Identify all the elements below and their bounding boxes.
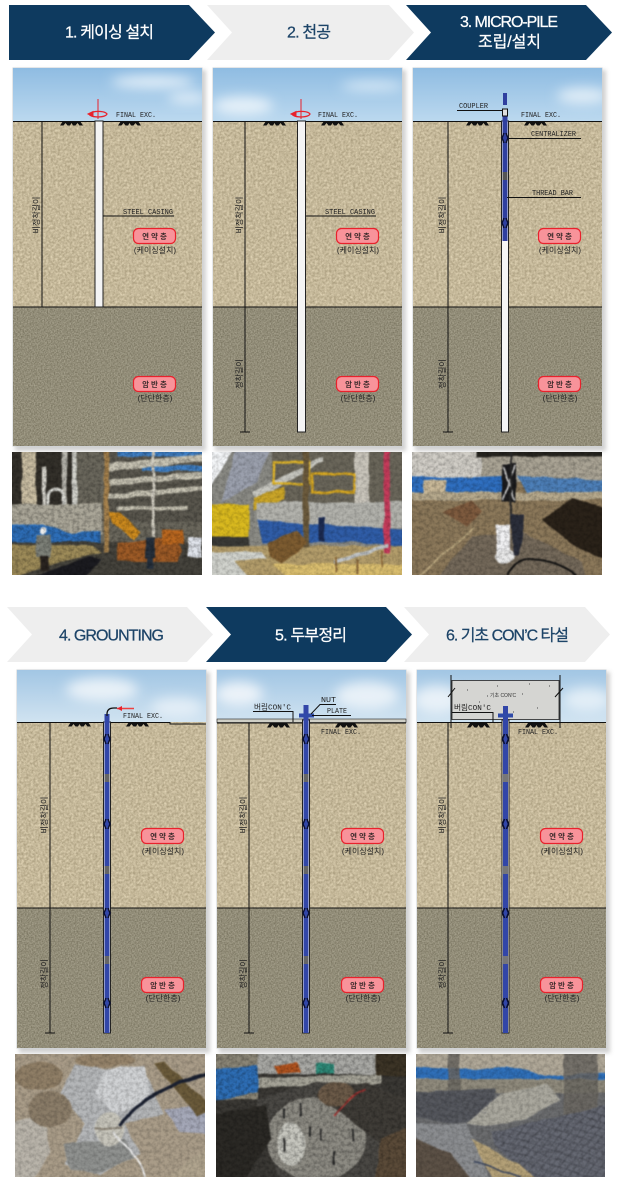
label: soft layer: 연 약 층 bbox=[345, 231, 370, 241]
label: rock layer bbox=[142, 978, 184, 1003]
depth line: 정착길이 bbox=[238, 959, 248, 989]
step header 3 bbox=[406, 5, 612, 60]
label: soft layer: (케이싱설치) bbox=[539, 245, 581, 255]
ground hatch bbox=[60, 121, 141, 126]
label: steel casing bbox=[306, 209, 376, 217]
label: steel casing bbox=[103, 209, 174, 217]
depth line: 비정착길이 bbox=[39, 797, 49, 833]
label: final exc: FINAL EXC. bbox=[123, 713, 163, 721]
panel: step 2 diagram bbox=[212, 68, 406, 451]
ground hatch bbox=[466, 121, 547, 126]
sky bbox=[213, 68, 405, 122]
label: soft layer: (케이싱설치) bbox=[342, 846, 384, 856]
rock layer bbox=[417, 908, 606, 1048]
label: soft layer: (케이싱설치) bbox=[337, 245, 379, 255]
micro-pile bar bbox=[502, 93, 508, 241]
label: soft layer: 연 약 층 bbox=[549, 831, 574, 841]
label: soft layer bbox=[342, 828, 384, 856]
panel: step 6 diagram bbox=[413, 670, 611, 1053]
label: final exc: FINAL EXC. bbox=[518, 729, 558, 737]
label: lean concrete bbox=[452, 702, 493, 722]
drilled hole bbox=[502, 121, 508, 432]
label: soft layer bbox=[336, 228, 379, 255]
step header 4 bbox=[7, 607, 213, 662]
panel: step 3 diagram bbox=[412, 68, 609, 451]
depth line: 정착길이 bbox=[437, 359, 447, 389]
photo: drilling rig bbox=[212, 452, 402, 575]
label: soft layer bbox=[538, 228, 581, 255]
lean concrete band bbox=[217, 719, 406, 722]
depth line: 정착길이 bbox=[437, 959, 447, 989]
label: rock layer: (단단한층) bbox=[146, 993, 181, 1003]
label: soft layer: 연 약 층 bbox=[547, 231, 572, 241]
drilled hole bbox=[298, 121, 306, 432]
label: nut bbox=[311, 697, 337, 714]
label: rock layer bbox=[134, 376, 176, 403]
label: rock layer bbox=[538, 376, 580, 403]
grouted pile bbox=[104, 714, 110, 1033]
step header 3: 조립/설치 bbox=[478, 33, 541, 51]
step header 3: 3. MICRO-PILE bbox=[460, 14, 558, 31]
depth line bbox=[437, 121, 453, 432]
label: rock layer: (단단한층) bbox=[545, 993, 580, 1003]
step header 5 bbox=[206, 607, 412, 662]
label: rock layer: 암 반 층 bbox=[345, 379, 370, 389]
sky bbox=[17, 670, 206, 724]
soft soil layer bbox=[13, 121, 202, 307]
step header 5: 5. 두부정리 bbox=[275, 626, 347, 644]
panel: step 1 diagram bbox=[12, 68, 208, 451]
photo: grouting bbox=[15, 1054, 205, 1177]
label: centralizer: CENTRALIZER bbox=[531, 131, 576, 139]
label: plate bbox=[312, 708, 351, 716]
label: final exc: FINAL EXC. bbox=[116, 112, 156, 120]
ground hatch bbox=[267, 723, 358, 728]
label: final exc: FINAL EXC. bbox=[321, 729, 361, 737]
label: lean concrete bbox=[253, 702, 293, 722]
step header 6 bbox=[404, 607, 610, 662]
step header 4: 4. GROUNTING bbox=[59, 628, 164, 644]
label: coupler: COUPLER bbox=[459, 103, 488, 111]
label: plate: PLATE bbox=[327, 708, 347, 716]
rock layer bbox=[413, 307, 602, 446]
soft soil layer bbox=[413, 121, 602, 307]
depth line: 비정착길이 bbox=[238, 797, 248, 833]
sky bbox=[215, 670, 406, 724]
panel: step 5 diagram bbox=[215, 670, 410, 1053]
rock layer bbox=[13, 307, 202, 446]
pile with head plate bbox=[498, 706, 513, 1033]
label: rock layer: (단단한층) bbox=[543, 393, 578, 403]
rock layer bbox=[213, 307, 402, 446]
depth line: 비정착길이 bbox=[437, 797, 447, 833]
label: lean concrete: 버림CON'C bbox=[254, 702, 291, 712]
label: rock layer: 암 반 층 bbox=[547, 379, 572, 389]
rock layer bbox=[217, 908, 406, 1048]
soft soil layer bbox=[217, 722, 406, 908]
step header 2 bbox=[207, 5, 414, 60]
label: rock layer bbox=[540, 978, 582, 1003]
label: coupler bbox=[457, 103, 503, 111]
label: rock layer bbox=[336, 376, 378, 403]
sky bbox=[13, 68, 208, 122]
depth line: 비정착길이 bbox=[234, 197, 244, 233]
label: soft layer bbox=[540, 828, 583, 856]
icon: rotation arrow bbox=[88, 99, 107, 119]
label: rock layer: (단단한층) bbox=[138, 393, 173, 403]
photo: foundation rebar bbox=[416, 1054, 605, 1177]
ground hatch bbox=[467, 723, 548, 728]
label: final exc: FINAL EXC. bbox=[318, 112, 358, 120]
sky bbox=[413, 68, 609, 122]
label: centralizer bbox=[509, 131, 581, 139]
steel casing bbox=[95, 121, 103, 307]
label: soft layer: 연 약 층 bbox=[150, 831, 175, 841]
rock layer bbox=[17, 908, 206, 1048]
label: rock layer: 암 반 층 bbox=[350, 980, 375, 990]
depth line bbox=[234, 121, 250, 432]
label: final exc: FINAL EXC. bbox=[521, 112, 561, 120]
label: soft layer bbox=[134, 228, 176, 255]
depth line: 정착길이 bbox=[234, 359, 244, 389]
soft soil layer bbox=[213, 121, 402, 307]
depth line bbox=[39, 722, 55, 1033]
depth line: 비정착길이 bbox=[31, 197, 41, 233]
depth line: 정착길이 bbox=[39, 959, 49, 989]
step header 2: 2. 천공 bbox=[287, 24, 331, 42]
label: soft layer: 연 약 층 bbox=[350, 831, 375, 841]
label: rock layer: 암 반 층 bbox=[549, 980, 574, 990]
foundation concrete: 기초 CON'C bbox=[490, 692, 517, 699]
label: soft layer: (케이싱설치) bbox=[134, 245, 176, 255]
label: soft layer: (케이싱설치) bbox=[541, 846, 583, 856]
ground hatch bbox=[263, 121, 344, 126]
label: steel casing: STEEL CASING bbox=[325, 209, 375, 217]
grout hose with red arrow bbox=[107, 706, 134, 716]
photo: casing rig bbox=[12, 452, 202, 575]
step header 1 bbox=[9, 5, 215, 60]
ground hatch bbox=[68, 722, 149, 726]
depth line bbox=[437, 723, 453, 1033]
label: lean concrete: 버림CON'C bbox=[454, 702, 491, 713]
label: rock layer: 암 반 층 bbox=[150, 980, 175, 990]
step header 6: 6. 기초 CON’C 타설 bbox=[446, 626, 569, 644]
label: rock layer: (단단한층) bbox=[341, 393, 376, 403]
label: nut: NUT bbox=[321, 697, 337, 705]
panel: step 4 diagram bbox=[16, 670, 210, 1053]
icon: rotation arrow bbox=[291, 99, 310, 119]
label: soft layer: (케이싱설치) bbox=[142, 846, 184, 856]
pile with head plate bbox=[299, 705, 314, 1033]
depth line bbox=[238, 723, 254, 1033]
label: steel casing: STEEL CASING bbox=[123, 209, 173, 217]
soft soil layer bbox=[17, 722, 206, 908]
label: soft layer: 연 약 층 bbox=[142, 231, 167, 241]
label: rock layer: 암 반 층 bbox=[142, 379, 167, 389]
label: thread bar: THREAD BAR bbox=[532, 190, 573, 198]
label: thread bar bbox=[507, 190, 581, 198]
soft soil layer bbox=[417, 722, 606, 908]
label: soft layer bbox=[142, 828, 184, 856]
photo: pile assembly bbox=[412, 452, 602, 575]
label: rock layer bbox=[342, 978, 384, 1003]
label: rock layer: (단단한층) bbox=[346, 993, 381, 1003]
depth line: 비정착길이 bbox=[437, 197, 447, 233]
sky bbox=[413, 670, 611, 724]
step header 1: 1. 케이싱 설치 bbox=[65, 24, 154, 42]
foundation concrete bbox=[448, 675, 563, 728]
photo: pile head trimming bbox=[216, 1054, 406, 1177]
